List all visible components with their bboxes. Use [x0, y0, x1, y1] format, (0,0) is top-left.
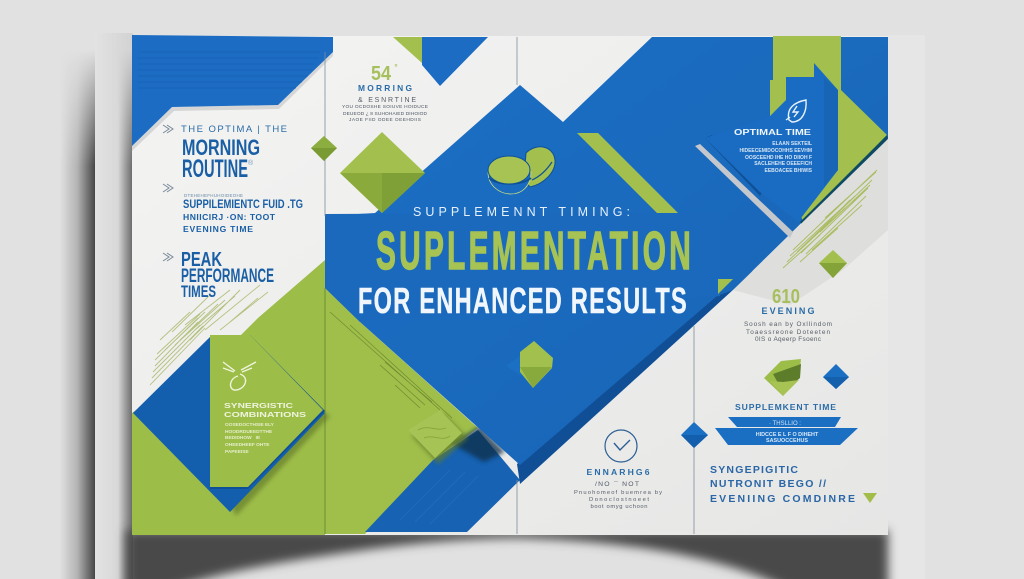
- card text: SACLEHEHE OEEEFICH: [754, 161, 812, 167]
- banner top: [728, 417, 841, 427]
- number: 54: [371, 63, 392, 85]
- panel: left blue diamond: [133, 335, 325, 512]
- tiny caption: DTEHEHEFHUHOIDEOHE: [184, 193, 243, 198]
- line three: EVENING TIME: [183, 224, 253, 234]
- left wall shadow: [60, 50, 95, 579]
- card text: PAPEEISE: [225, 449, 249, 455]
- page base: [132, 36, 888, 535]
- title kicker: SUPPLEMENNT TIMING:: [413, 205, 630, 219]
- icon: big green diamond: [340, 132, 425, 213]
- brochure: [132, 35, 888, 535]
- backing sheet right: [888, 35, 925, 579]
- panel: right green fold: [770, 36, 887, 222]
- title secondary: FOR ENHANCED RESULTS: [358, 280, 688, 321]
- line two: HNIICIRJ ·ON: TOOT: [183, 212, 276, 222]
- panel: centre title banner: [325, 212, 720, 322]
- sublabel: /NO ¯ NOT: [595, 480, 639, 488]
- panel: middle-lower green: [325, 288, 478, 534]
- decorative shadow under centre: [452, 426, 505, 462]
- card text: EEBOACEE BHIWIS: [764, 168, 813, 174]
- icon: green small tab: [408, 410, 468, 464]
- icon: green gem evening: [764, 359, 801, 396]
- line one: PEAK: [181, 249, 222, 271]
- panel: bottom blue strip: [365, 430, 520, 532]
- card text: OOSEDOCTHSIE ELY: [225, 422, 275, 428]
- card text: [739, 141, 813, 174]
- body lines: YOU OCDOSHE SOIUVE HOIDUCE: [342, 104, 428, 110]
- decorative soft shadow of diamond: [228, 410, 330, 516]
- text block: supplement time banners: [715, 402, 858, 445]
- text block: top morning column: DEUEOD ¿ 8 SUHOHAIED DIHOIOD: [343, 111, 428, 117]
- banner top text: · THSLLIO :: [769, 421, 801, 427]
- top centre green and blue triangle: [393, 37, 488, 86]
- title main: SUPLEMENTATION: [376, 221, 694, 281]
- text block: evening column: 0IS o Aqeerp Fsoenc: [755, 336, 822, 343]
- icon: green gem centre: [506, 341, 553, 388]
- panel: right grey hatch area: [733, 139, 888, 305]
- card text: OHEEDHEEF OHTE: [225, 442, 270, 448]
- card heading: SYNERGISTIC: [224, 401, 293, 410]
- text block: top morning column: JAOE FIID ODEE OEEHDIIS: [349, 117, 421, 123]
- text block: enhancing: boot omyg uchoon: [590, 504, 648, 510]
- decorative shadow on left sheet: [118, 50, 133, 579]
- label: MORRING: [358, 83, 412, 93]
- line one: SYNGEPIGITIC: [710, 464, 798, 476]
- heading: MORNING: [182, 135, 260, 160]
- line three: EVENIING COMDINRE: [710, 493, 855, 505]
- icon: plant sprout: [223, 362, 256, 390]
- panel: lower diagonal dark band: [517, 268, 757, 484]
- body lines: Pnuohomeof buemrea by: [574, 490, 662, 496]
- body lines: Soosh ean by Oxllindom: [744, 321, 832, 328]
- text block: morning routine: [163, 124, 288, 183]
- card text: OOSCEEHD IHE HO DIIOH F: [745, 155, 812, 161]
- text block: synergistic nutrient: [710, 464, 855, 505]
- card text: [225, 422, 275, 455]
- panel: lower-left green: [132, 260, 325, 535]
- card text: ELAAN SEKTEIL: [772, 141, 812, 147]
- banner bottom text: [756, 432, 819, 444]
- banner bottom text: HIDCCE E L F O DIHEHT: [756, 432, 819, 438]
- text block: enhancing: Donoclostnoeet: [589, 497, 649, 503]
- icon: leaf: [786, 100, 806, 122]
- label: EVENING: [762, 306, 814, 316]
- icon: green triangle: [863, 493, 877, 503]
- card text: HIDEECEMIDOCOHHS EEVHM: [739, 148, 812, 154]
- banner bottom text: SASUOCCEHUS: [766, 438, 808, 444]
- card text: HOODRDUEEDTTHE: [225, 429, 273, 435]
- line two: PERFORMANCE: [181, 266, 274, 287]
- kicker: THE OPTIMA | THE: [181, 124, 288, 135]
- panel: upper-right blue and central diamond: [325, 37, 888, 465]
- decorative hatch lines top-left of green: [150, 285, 268, 385]
- panel: top-left blue header: [132, 35, 333, 151]
- chevron: [163, 253, 173, 261]
- text block: peak performance: [163, 249, 274, 301]
- number: 610: [772, 286, 800, 308]
- backing sheet left: [95, 33, 133, 579]
- icon: blue diamond: [823, 364, 849, 389]
- line three: TIMES: [181, 282, 216, 301]
- card heading: OPTIMAL TIME: [734, 127, 811, 137]
- sublabel: & ESNRTINE: [358, 97, 416, 104]
- card subheading: COMBINATIONS: [224, 410, 306, 419]
- small green triangle: [718, 279, 733, 294]
- icon: clock: [605, 430, 637, 462]
- icon: small right green diamond: [819, 250, 847, 278]
- text block: top morning column: [342, 63, 428, 123]
- card: synergistic combinations: [210, 335, 325, 489]
- label: ENNARHG6: [586, 467, 650, 477]
- icon: supplement capsules: [488, 147, 555, 194]
- card text: BEDIDHOW IE: [225, 435, 261, 441]
- text block: supplement fuel: [163, 184, 303, 234]
- heading second line: ROUTINE: [182, 155, 248, 183]
- decorative dark edge of fold: [800, 135, 888, 226]
- text block: evening column: [744, 286, 832, 343]
- panel: optimal time blue card: [695, 63, 838, 238]
- bottom cast shadow: [126, 530, 888, 579]
- chevron bullet: [163, 125, 173, 133]
- icon: blue diamond fold: [681, 422, 708, 448]
- degree: °: [394, 63, 398, 72]
- line one: SUPPILEMIENTC FUID .TG: [183, 197, 303, 211]
- icon: small green diamond left: [311, 136, 337, 161]
- banner bottom: [715, 428, 858, 445]
- line two: NUTRONIT BEGO //: [710, 478, 826, 490]
- heading: SUPPLEMKENT TIME: [735, 402, 836, 412]
- text block: evening column: Toaessreone Doteeten: [746, 329, 830, 336]
- decorative thin dark lines on green: [330, 312, 452, 418]
- title: main heading block: [358, 205, 694, 321]
- fold lines: [325, 37, 694, 534]
- text block: enhancing: [574, 467, 662, 510]
- chevron: [163, 184, 173, 192]
- green accent stripe: [577, 133, 678, 213]
- superscript: ®: [248, 159, 254, 167]
